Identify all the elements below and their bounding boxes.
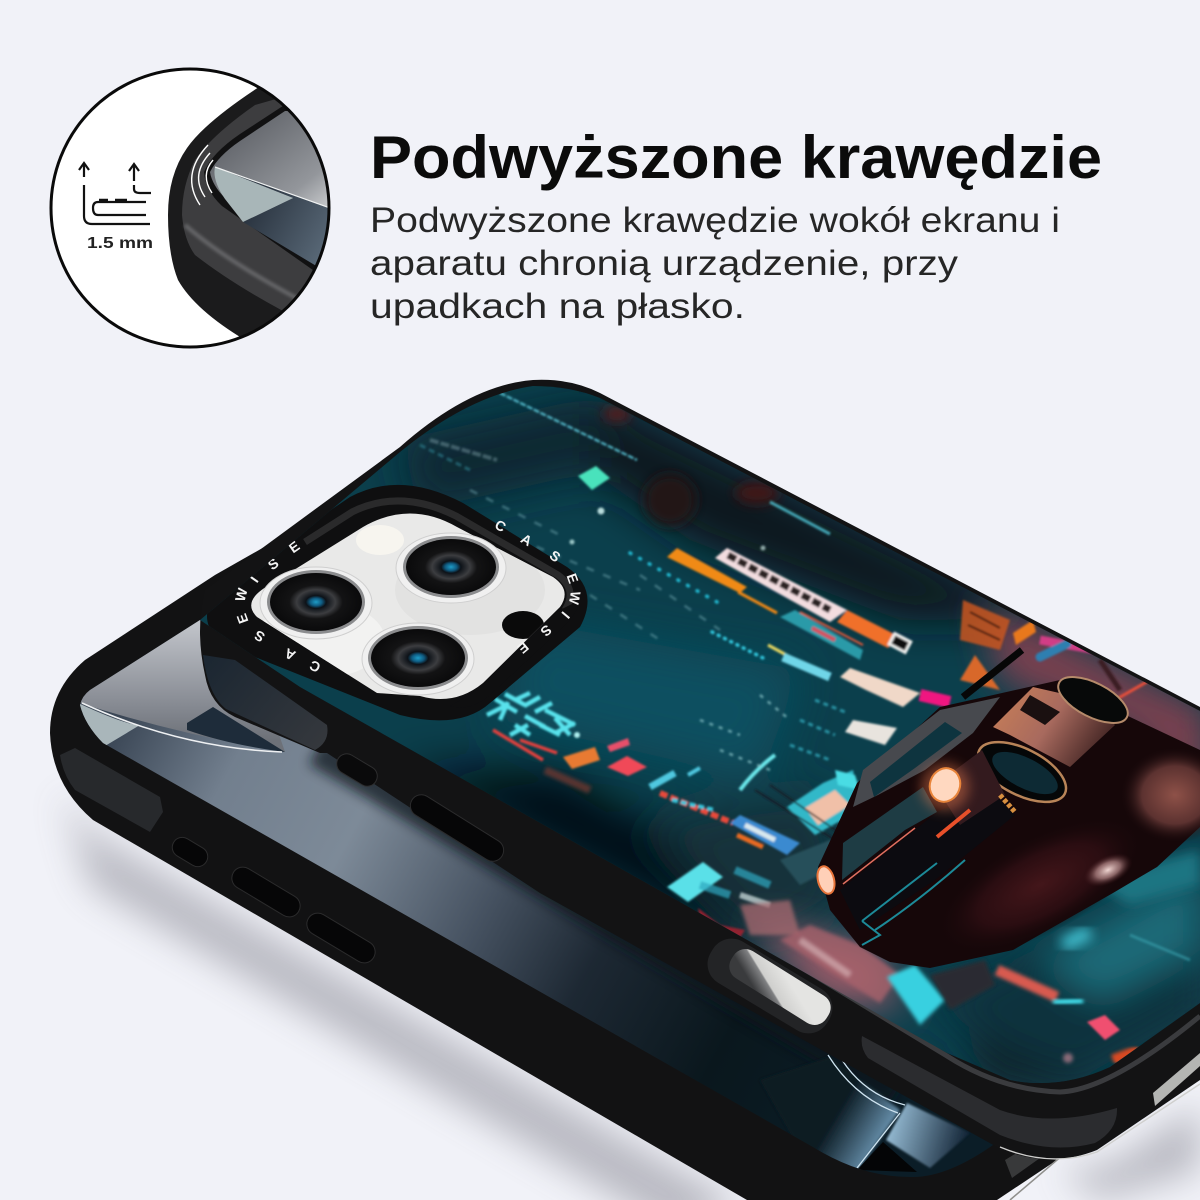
impact arcs [192,145,213,205]
lower phone screen [80,620,993,1177]
upper phone bottom grip [862,1036,1117,1148]
car lower headlight [816,865,836,895]
CASEWISE ring lettering: S [546,547,564,565]
car body silhouette [818,680,1200,968]
CASEWISE ring lettering: S [251,627,268,646]
charging port [699,930,841,1042]
shadow under upper phone [320,745,900,1085]
CASEWISE ring lettering: S [265,555,282,573]
CASEWISE ring lettering: C [307,657,323,676]
CASEWISE ring lettering: E [233,612,251,626]
front wheel [976,740,1068,804]
dark red bokeh [603,407,779,526]
car wet lower body [962,834,1118,936]
CASEWISE ring lettering: E [514,639,532,657]
flash [356,525,404,555]
speaker grille [1153,1053,1200,1106]
description text: aparatu chronią urządzenie, przy [370,244,959,283]
lens top right [396,533,506,603]
car windshield [853,697,1000,807]
lower phone frame [50,470,1200,1200]
ring inner segment over plate [450,600,580,708]
neon signs lower left [487,693,860,945]
car [815,650,1200,981]
icon: 1.5 mm raised edge diagram [79,163,151,224]
car teal trim [862,860,965,945]
description text: Podwyższone krawędzie wokół ekranu i [370,201,1060,240]
CASEWISE ring lettering: I [246,573,262,585]
car fender [946,750,1005,825]
lower phone corner grip [60,748,163,832]
lens left [260,567,372,639]
upper phone [200,380,1200,1159]
camera island [207,485,588,720]
wet road reflections [780,850,1200,1063]
lower phone [50,548,1060,1200]
lower phone far port [1005,1145,1040,1178]
upper phone frame [200,380,1200,1159]
bumper close-up photo [168,88,328,336]
neon signs top [420,393,1150,760]
CASEWISE ring lettering [232,516,584,676]
description text [370,201,1060,326]
car hood [842,787,937,880]
CASEWISE ring lettering: E [286,538,303,556]
car orange indicator [937,810,970,837]
phone drop shadows [62,790,1200,1200]
rear wheel [1057,676,1129,724]
upper phone buttons [333,750,508,865]
artwork base colours [190,370,1200,1100]
upper phone camera-side grip [203,655,328,750]
CASEWISE ring lettering: E [564,571,582,585]
island frame [207,485,588,720]
CASEWISE ring lettering: A [518,530,535,549]
callout: raised edge detail circle [51,69,345,347]
car spoiler [963,650,1022,697]
car side logos [1000,795,1015,812]
CASEWISE ring lettering: I [558,609,573,622]
plate shading [498,548,536,568]
CASEWISE ring lettering: A [282,645,298,664]
car rear reflection [1128,754,1200,839]
label: 1.5 mm: 1.5 mm [87,235,153,252]
CASEWISE ring lettering: C [492,516,509,535]
lower phone buttons [169,834,379,967]
heading: Podwyższone krawędzie [370,124,1102,191]
lens bottom [362,623,474,695]
wallpaper black wedge [857,1142,917,1172]
microphone hole [502,611,544,639]
CASEWISE ring lettering: W [566,590,584,607]
car roof and rear hood [993,687,1115,767]
car headlight [921,763,969,811]
CASEWISE ring lettering: W [232,585,251,603]
case artwork: neon city with car [190,370,1200,1100]
city lights [420,393,1200,1063]
wet highlight [1086,855,1130,885]
CASEWISE ring lettering: S [537,622,555,640]
lens plate [251,514,565,699]
description text: upadkach na płasko. [370,287,745,326]
